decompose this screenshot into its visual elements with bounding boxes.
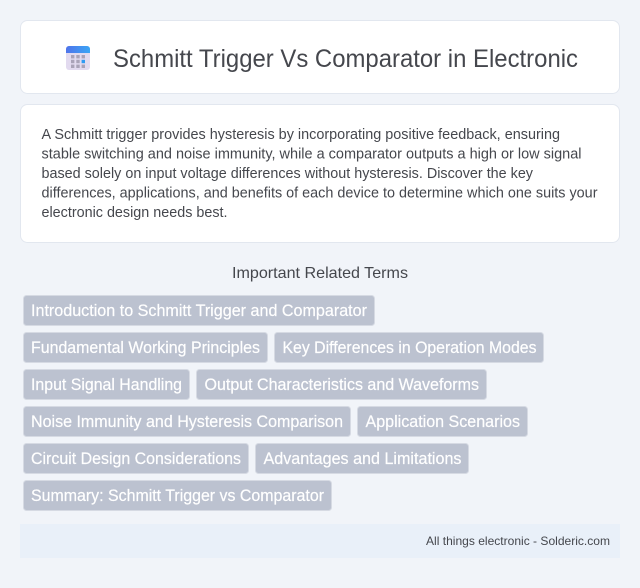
tag: applications bbox=[358, 406, 528, 436]
text block: description: stable switching and noise immunity, while a comparator outputs a high or low signal bbox=[42, 146, 582, 162]
heading: related terms: Important Related Terms bbox=[232, 265, 408, 282]
tag: fundamentals bbox=[24, 332, 268, 362]
tag: introduction bbox=[24, 296, 374, 326]
text block: description: based solely on input voltage differences without hysteresis. Discover the key bbox=[42, 166, 534, 182]
title: Schmitt Trigger Vs Comparator in Electronic bbox=[113, 45, 578, 73]
tag: output characteristics bbox=[196, 370, 486, 400]
text block: description bbox=[42, 127, 598, 221]
icon: calculator grid bbox=[66, 46, 90, 70]
tag: introduction: Introduction to Schmitt Trigger and Comparator bbox=[31, 302, 368, 320]
tag: key differences bbox=[274, 332, 544, 362]
tag: fundamentals: Fundamental Working Principles bbox=[31, 339, 260, 357]
tag: summary bbox=[24, 480, 332, 510]
tag: circuit design bbox=[24, 444, 248, 474]
tag: applications: Application Scenarios bbox=[366, 413, 520, 431]
tag: advantages: Advantages and Limitations bbox=[264, 450, 462, 468]
text block: description: differences, applications, and benefits of each device to determine which one suits your bbox=[42, 186, 598, 202]
footer bbox=[20, 524, 620, 558]
tag: noise immunity: Noise Immunity and Hysteresis Comparison bbox=[31, 413, 343, 431]
tag: advantages bbox=[256, 444, 468, 474]
panel: header bbox=[20, 20, 620, 94]
text block: description: electronic design needs best. bbox=[42, 205, 228, 221]
footer credit: All things electronic - Solderic.com bbox=[426, 534, 610, 548]
tag: input signal: Input Signal Handling bbox=[31, 376, 182, 394]
tag: input signal bbox=[24, 370, 190, 400]
tag: circuit design: Circuit Design Considerations bbox=[31, 450, 241, 468]
text block: description: A Schmitt trigger provides hysteresis by incorporating positive feedback, ensuring bbox=[42, 127, 560, 143]
panel: introduction bbox=[20, 104, 620, 242]
tag: noise immunity bbox=[24, 406, 350, 436]
tag: key differences: Key Differences in Operation Modes bbox=[282, 339, 536, 357]
tag: summary: Summary: Schmitt Trigger vs Comparator bbox=[31, 487, 325, 505]
tag list bbox=[24, 296, 544, 510]
tag: output characteristics: Output Characteristics and Waveforms bbox=[204, 376, 479, 394]
